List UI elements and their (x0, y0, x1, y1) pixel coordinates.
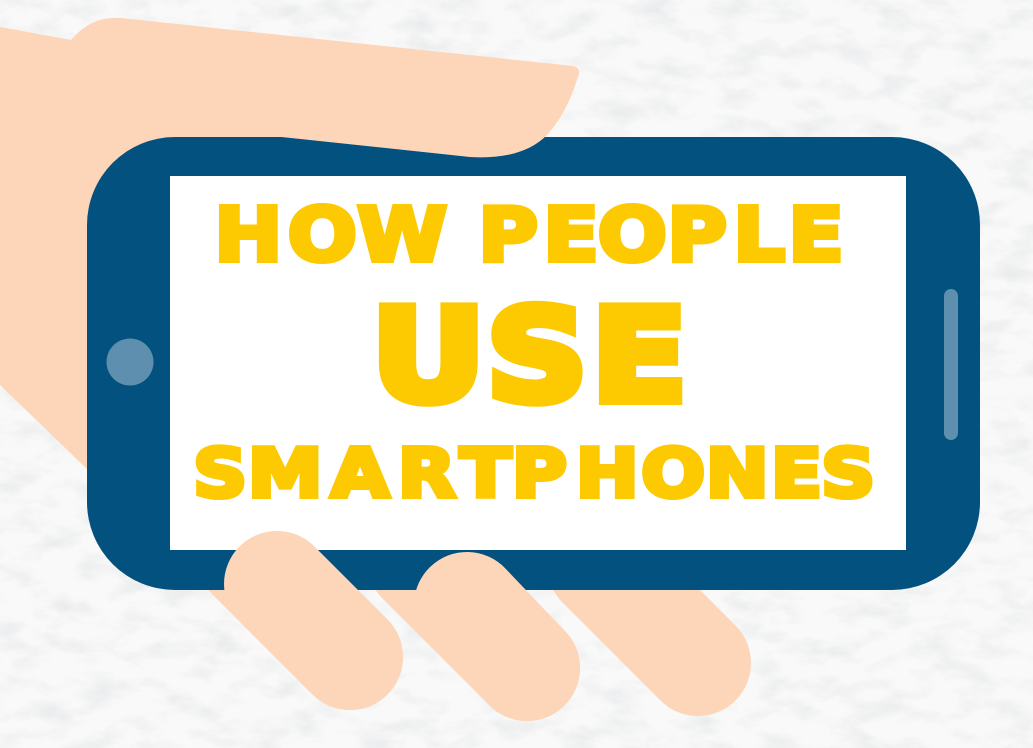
title line: smartphones: SMARTPHONES (193, 434, 875, 513)
hand: finger bases behind phone (250, 557, 698, 668)
finger one (277, 584, 350, 657)
title line: use: USE (372, 283, 687, 430)
hand: palm (0, 18, 572, 470)
finger two (467, 605, 527, 668)
title line: how people: HOW PEOPLE (214, 193, 844, 279)
title (193, 193, 875, 513)
phone body (87, 137, 980, 590)
phone home button (106, 338, 154, 386)
hand: front fingers (277, 584, 527, 668)
phone screen (170, 176, 906, 550)
hand: thumb over phone (120, 18, 579, 157)
phone side slider (944, 289, 958, 440)
